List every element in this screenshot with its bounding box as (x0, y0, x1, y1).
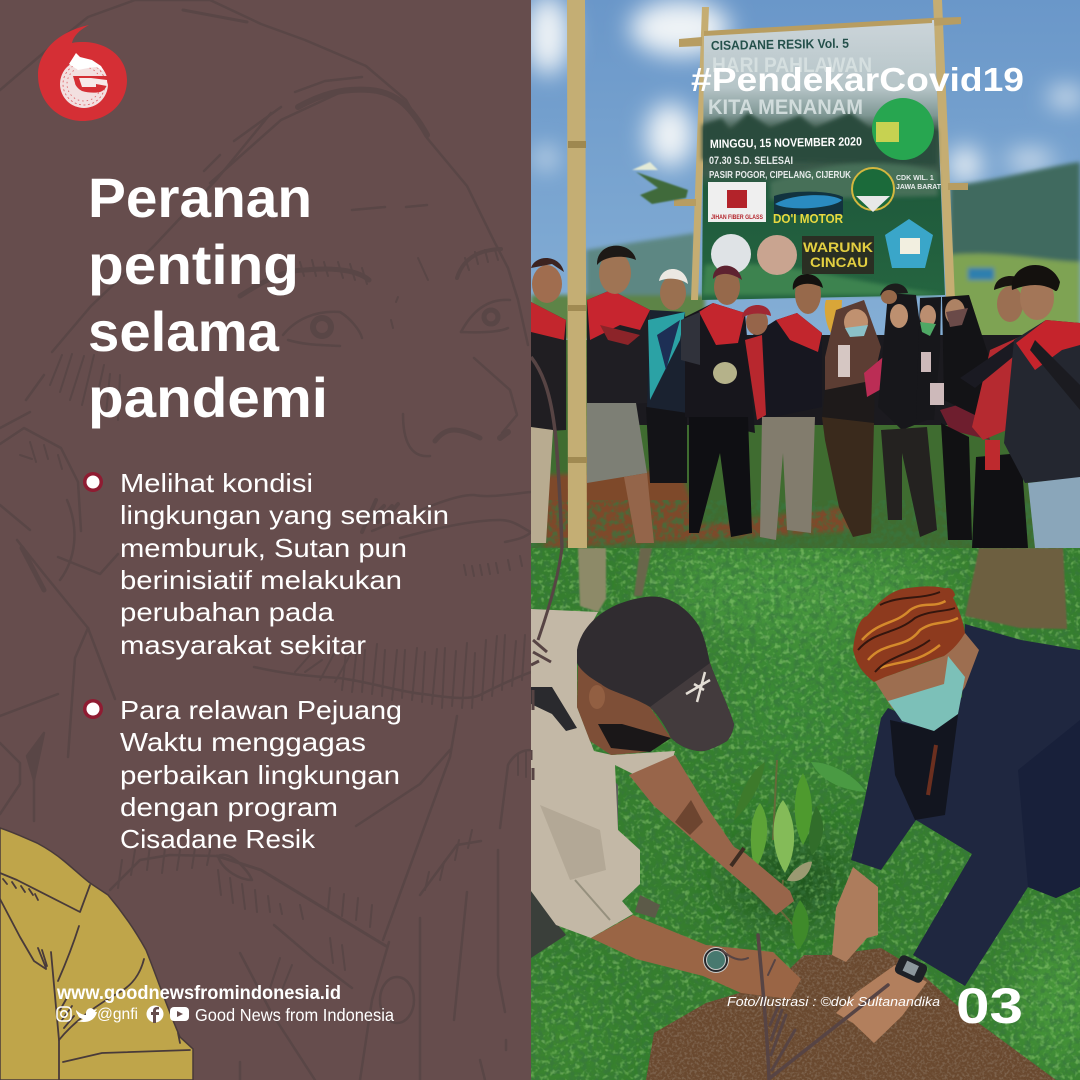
dark sprig of illustration (722, 935, 888, 1080)
tree trunks (578, 548, 1067, 629)
title: pandemi (88, 366, 328, 429)
face and mask (577, 663, 671, 755)
pants (531, 891, 566, 958)
person right (960, 276, 1036, 548)
banner: HARI PAHLAWAN (712, 54, 872, 77)
bullet text: memburuk, Sutan pun (120, 533, 407, 563)
panel: left background (0, 0, 531, 1080)
banner (702, 18, 945, 340)
line art curve over photo (531, 357, 562, 548)
woman 2 (878, 293, 937, 537)
banner seal: 50 years (872, 98, 934, 160)
banner: 07.30 S.D. SELESAI (709, 155, 793, 167)
hands (832, 867, 878, 962)
footer: website and social (56, 983, 394, 1025)
man with cap (531, 597, 801, 999)
website url: www.goodnewsfromindonesia.id (56, 983, 341, 1004)
handle: @gnfi (97, 1006, 138, 1023)
bullet text: Para relawan Pejuang (120, 695, 402, 725)
seedling (734, 760, 866, 950)
front bamboo pole (567, 0, 587, 548)
cap (577, 597, 734, 751)
dark backing behind group (636, 335, 1022, 425)
photo: group with banner (526, 0, 1080, 548)
bullet text: Cisadane Resik (120, 824, 316, 854)
bullet text: Waktu menggagas (120, 727, 366, 757)
shirt (531, 609, 675, 938)
person far right (1004, 265, 1080, 548)
sky and clouds (531, 0, 1080, 340)
title (88, 166, 328, 429)
bracelet and watch (731, 848, 744, 866)
person 3 (646, 269, 688, 483)
channel name: Good News from Indonesia (195, 1005, 394, 1025)
person 5 (742, 274, 823, 540)
man with batik headband (832, 586, 1080, 1043)
arms (629, 755, 794, 915)
batik headband (853, 586, 965, 682)
jacket (851, 624, 1080, 986)
bullet text: perubahan pada (120, 597, 335, 627)
hashtag: #PendekarCovid19 (691, 61, 1024, 98)
icon: instagram (57, 1007, 71, 1021)
ground (531, 340, 1080, 548)
banner: PASIR POGOR, CIPELANG, CIJERUK (709, 170, 852, 181)
bullet text: lingkungan yang semakin (120, 500, 449, 530)
face mask (888, 656, 965, 731)
page number: 03 (956, 978, 1023, 1034)
strap (531, 687, 577, 731)
woman 3 (919, 297, 941, 372)
banner: DO'I MOTOR (773, 211, 844, 226)
line art strokes over photo (531, 548, 562, 780)
face (874, 633, 979, 728)
banner: JAWA BARAT (896, 184, 942, 191)
person 2 (587, 246, 654, 543)
icon: facebook (146, 1006, 164, 1023)
banner: CINCAU (810, 254, 868, 270)
banner: MINGGU, 15 NOVEMBER 2020 (710, 134, 862, 151)
banner: WARUNK (803, 239, 873, 255)
bullet 1 (83, 468, 449, 660)
person 4 (681, 266, 755, 537)
banner: JIHAN FIBER GLASS (711, 215, 763, 221)
bullet text (120, 695, 402, 854)
volunteers (531, 246, 1080, 548)
leaves (632, 162, 688, 204)
photo credit: Foto/Ilustrasi : ©dok Sultanandika (727, 995, 940, 1009)
man behind (880, 283, 908, 304)
logo emblem: eagle ring (60, 53, 108, 108)
bullet text: perbaikan lingkungan (120, 760, 400, 790)
grass background (520, 545, 1080, 1080)
bullet text: berinisiatif melakukan (120, 565, 402, 595)
logo: red GNFI circle (38, 25, 127, 121)
bullet text: dengan program (120, 792, 338, 822)
person 1 (531, 258, 566, 543)
title: selama (88, 300, 280, 363)
photo: planting a tree (520, 545, 1080, 1080)
banner: CDK WIL. 1 (896, 175, 934, 182)
icon: youtube (170, 1007, 189, 1021)
bullet text: Melihat kondisi (120, 468, 313, 498)
mountains (531, 162, 1080, 340)
bullet marker (83, 472, 103, 492)
banner: KITA MENANAM (708, 96, 863, 119)
banner: CISADANE RESIK Vol. 5 (711, 36, 849, 53)
title: penting (88, 233, 299, 296)
icon: twitter (76, 1008, 97, 1022)
illustration: yellow shirt (0, 828, 193, 1080)
title: Peranan (88, 166, 312, 229)
bullet text: masyarakat sekitar (120, 630, 366, 660)
bullet marker (83, 699, 103, 719)
woman 4 (930, 295, 990, 540)
woman 1 (822, 300, 882, 537)
illustration: line-art portrait background (0, 0, 531, 1080)
bullet 2 (83, 695, 402, 854)
bullet text (120, 468, 449, 660)
bamboo poles (674, 0, 968, 300)
soil (640, 940, 1060, 1080)
